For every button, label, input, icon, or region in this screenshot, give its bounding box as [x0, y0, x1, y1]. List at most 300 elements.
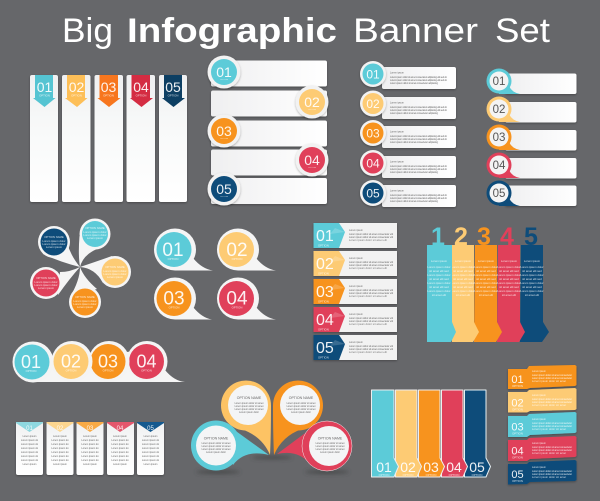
column 1: Lorem ipsum dolor [427, 289, 451, 293]
column 4 [497, 223, 525, 342]
column 05: OPTION [472, 473, 482, 477]
column 2 [451, 223, 479, 342]
card 04: Lorem ipsum do [111, 455, 129, 458]
ribbon 02: 02 [69, 79, 84, 95]
row 01: Lorem ipsum [349, 229, 363, 232]
petal orange: Lorem ipsum [77, 305, 94, 309]
column 01: 01 [376, 459, 392, 475]
circle 03: 03 [98, 352, 118, 372]
column 3: Lorem ipsum dolor [474, 265, 498, 269]
circle 04: 04 [304, 152, 320, 168]
row 02: 02 [316, 256, 334, 273]
circle 04 [360, 150, 386, 176]
row 03: Lorem ipsum dolor sit amet elit [349, 295, 387, 298]
row 01: OPTION [318, 244, 329, 248]
panel: small cards [16, 422, 164, 475]
card text: Lorem ipsum dolor sit amet consectetur adipiscing elit sed do [390, 106, 448, 109]
circle 05: OPTION [220, 196, 228, 198]
column 1: Lorem ipsum dolor [427, 265, 451, 269]
circle 03 [360, 120, 386, 146]
column 2: Lorem ipsum dolor [451, 265, 475, 269]
column 4: Lorem ipsum [501, 259, 518, 263]
column 03: OPTION [426, 473, 436, 477]
petal blue: OPTION NAME [44, 235, 64, 239]
panel: text cards with circles [360, 61, 456, 207]
column 04: 04 [446, 459, 462, 475]
ribbon 01: 01 [37, 79, 52, 95]
base tail [30, 350, 185, 382]
bubble 02: 02 [226, 240, 248, 261]
bubble 04: OPTION [232, 306, 242, 310]
circle 05: 05 [366, 186, 380, 200]
column 2: Lorem ipsum dolor [451, 281, 475, 285]
card 05: Lorem ipsum do [142, 447, 160, 450]
column 3: sit amet elit [479, 293, 493, 297]
column 4: sit amet elit sed [499, 269, 519, 273]
card text: Lorem ipsum [390, 102, 404, 104]
row 01: Lorem ipsum dolor sit amet consectetur elit [349, 236, 393, 239]
row 01: Lorem ipsum dolor sit amet elit [349, 239, 387, 242]
column 03 [418, 390, 444, 477]
tab 03: Lorem ipsum [532, 418, 546, 421]
tab 01: 01 [493, 76, 505, 88]
tab 01: Lorem ipsum dolor sit amet [532, 380, 566, 383]
pin teal [191, 420, 269, 470]
circle 01: OPTION [220, 79, 228, 81]
row 04: 04 [316, 312, 334, 329]
card 02: Lorem ipsum [53, 435, 67, 438]
title: Big [62, 12, 113, 50]
petal orange [69, 267, 101, 318]
petal red [30, 267, 80, 299]
petal yellow: OPTION NAME [105, 265, 125, 269]
card 05: Lorem ipsum do [142, 451, 160, 454]
card text: Lorem ipsum dolor sit amet consectetur adipiscing elit sed do [390, 76, 448, 79]
tab 05: Lorem ipsum dolor sit amet consectetur [532, 470, 572, 473]
ribbon 03: OPTION [103, 94, 114, 98]
circle 01: 01 [21, 352, 41, 372]
tab 02: Lorem ipsum dolor sit amet consectetur [532, 401, 572, 404]
petal teal: Lorem ipsum dolor [83, 230, 107, 234]
row 02: Lorem ipsum dolor sit amet elit [349, 267, 387, 270]
petal red: Lorem ipsum dolor [34, 283, 58, 287]
bubble 04 [217, 278, 276, 320]
row 03: 03 [316, 284, 334, 301]
petal yellow [80, 256, 131, 288]
card 03: Lorem ipsum [83, 463, 97, 466]
card text: Lorem ipsum [390, 130, 404, 134]
circle 02 [52, 341, 92, 382]
bubble 02 [217, 228, 276, 270]
circle 04 [126, 341, 168, 382]
panel: map pins [191, 380, 352, 474]
tab 01: Lorem ipsum dolor sit amet consectetur [532, 377, 572, 380]
pin yellow: Lorem ipsum dolor sit amet [235, 408, 264, 411]
column 5 [520, 223, 549, 342]
card text: Lorem ipsum dolor sit amet consectetur adipiscing [390, 200, 439, 203]
tab 02: Lorem ipsum dolor sit amet [532, 404, 566, 407]
card 03: Lorem ipsum [83, 435, 97, 438]
pin teal: Lorem ipsum dolor sit amet [202, 448, 231, 451]
card 04: Lorem ipsum [113, 463, 127, 466]
row 03: OPTION [318, 300, 329, 304]
tab 04: 04 [511, 446, 524, 458]
panel: ring tabs [486, 68, 576, 206]
column 4: 4 [500, 223, 514, 251]
column 3: Lorem ipsum dolor [474, 281, 498, 285]
card 01: Lorem ipsum [23, 463, 36, 466]
card 03: Lorem ipsum do [81, 455, 99, 458]
tab 05: Lorem ipsum [532, 466, 546, 469]
column 04: OPTION [449, 473, 459, 477]
card 03: Lorem ipsum do [81, 459, 99, 462]
panel: speech bubble numbers [154, 228, 276, 320]
row 04: OPTION [318, 328, 329, 332]
ribbon 05: 05 [165, 79, 181, 95]
title: Set [495, 12, 551, 50]
row 05: Lorem ipsum dolor sit amet consectetur elit [349, 348, 393, 351]
panel: pinwheel [30, 218, 131, 318]
column 2: Lorem ipsum dolor [451, 273, 475, 277]
column 1: 1 [431, 223, 445, 251]
row 05: Lorem ipsum dolor sit amet consectetur elit [349, 345, 393, 348]
column 1: sit amet elit sed [429, 277, 449, 281]
column 4: sit amet elit sed [499, 285, 519, 289]
tab 03: 03 [493, 132, 505, 144]
bubble 01 [154, 228, 213, 270]
title: Infographic [127, 12, 337, 50]
card 02: Lorem ipsum do [51, 439, 69, 442]
pin teal: Lorem ipsum dolor [206, 451, 226, 454]
circle 05: 05 [216, 181, 232, 197]
panel: arrow text rows [314, 223, 397, 360]
circle 02: 02 [304, 94, 320, 110]
panel: connected circles [12, 341, 185, 382]
column 4: sit amet elit [502, 293, 516, 297]
petal red: Lorem ipsum dolor [34, 280, 58, 284]
ribbon 02: OPTION [71, 94, 82, 98]
column 5: Lorem ipsum dolor [520, 281, 544, 285]
card 01: Lorem ipsum do [21, 439, 39, 442]
row 01: 01 [316, 228, 334, 245]
row 05: Lorem ipsum [349, 341, 363, 344]
pin red: Lorem ipsum dolor sit amet [316, 445, 345, 448]
tab 03: Lorem ipsum dolor sit amet consectetur [532, 422, 572, 425]
circle 03: 03 [216, 123, 232, 139]
circle 05 [208, 172, 240, 206]
pin orange: OPTION NAME [289, 396, 314, 400]
card 05: Lorem ipsum do [142, 439, 160, 442]
pin orange: Lorem ipsum dolor sit amet [287, 402, 316, 405]
card 01: Lorem ipsum do [21, 451, 39, 454]
card 03: Lorem ipsum do [81, 447, 99, 450]
ribbon 02 [65, 75, 88, 107]
card 05: Lorem ipsum [144, 463, 157, 466]
circle 03: OPTION [103, 368, 113, 372]
ribbon 04: 04 [133, 79, 149, 95]
tab 05: Lorem ipsum dolor sit amet consectetur [532, 473, 572, 476]
petal blue: Lorem ipsum [46, 245, 63, 249]
column 5: sit amet elit sed [522, 269, 542, 273]
row 04: Lorem ipsum [349, 313, 363, 316]
column 1: sit amet elit [432, 293, 446, 297]
row 02 [314, 251, 397, 276]
card 01: 01 [26, 426, 33, 432]
tab 02: 02 [493, 104, 505, 116]
tab 04: OPTION [512, 456, 523, 460]
bubble 01: OPTION [168, 257, 178, 261]
ribbon 03: 03 [101, 79, 116, 95]
card 05: 05 [147, 426, 154, 432]
card 03: Lorem ipsum do [81, 443, 99, 446]
card 02: Lorem ipsum do [51, 451, 69, 454]
card 02 [46, 422, 74, 475]
ribbon 01 [33, 75, 56, 107]
pin red: Lorem ipsum dolor sit amet [316, 442, 345, 445]
tab 02: OPTION [512, 408, 523, 412]
column 2: 2 [454, 223, 468, 251]
panel: numbered column arrows [427, 223, 549, 342]
tab 02: 02 [511, 398, 524, 410]
row 05: OPTION [318, 356, 329, 360]
row 05 [314, 335, 397, 360]
petal yellow: Lorem ipsum [107, 275, 124, 279]
row 02: Lorem ipsum dolor sit amet consectetur elit [349, 264, 393, 267]
column 4: sit amet elit sed [499, 277, 519, 281]
circle 04: OPTION [141, 368, 152, 372]
panel: vertical cards with arrow ribbons [30, 75, 187, 202]
petal red: OPTION NAME [36, 276, 56, 280]
tab 03: Lorem ipsum dolor sit amet [532, 428, 566, 431]
tab 05: OPTION [512, 479, 523, 483]
circle 02 [360, 90, 386, 116]
column 3: Lorem ipsum dolor [474, 273, 498, 277]
circle 01 [360, 61, 386, 87]
column 02 [396, 390, 422, 477]
column 1: Lorem ipsum [431, 259, 448, 263]
pin red: Lorem ipsum dolor [320, 451, 340, 454]
row 05: 05 [316, 340, 334, 357]
column 01: OPTION [379, 473, 389, 477]
column 2: Lorem ipsum dolor [451, 289, 475, 293]
circle 02: OPTION [308, 109, 316, 111]
column 3: Lorem ipsum dolor [474, 289, 498, 293]
tab 04: Lorem ipsum dolor sit amet [532, 452, 566, 455]
tab 01 [508, 365, 576, 389]
column 2: sit amet elit sed [453, 269, 473, 273]
card text: Lorem ipsum dolor sit amet consectetur adipiscing elit sed do [390, 138, 448, 141]
column 05 [464, 390, 490, 477]
tab 01: 01 [511, 374, 524, 386]
tab 05: 05 [493, 188, 505, 200]
circle 01: 01 [216, 64, 232, 80]
panel: tall outlined columns [372, 390, 490, 477]
column 03: 03 [423, 459, 439, 475]
column 5: sit amet elit [525, 293, 539, 297]
pin orange: Lorem ipsum dolor [291, 411, 311, 414]
column 04 [442, 390, 468, 477]
tab 04 [508, 436, 576, 461]
column 2: sit amet elit sed [453, 277, 473, 281]
circle 01: 01 [366, 68, 380, 82]
row 04: Lorem ipsum dolor sit amet consectetur elit [349, 317, 393, 320]
column 1: Lorem ipsum dolor [427, 281, 451, 285]
tab 02: Lorem ipsum dolor sit amet consectetur [532, 398, 572, 401]
tab 03: OPTION [512, 432, 523, 436]
row 02: OPTION [318, 272, 329, 276]
pin orange: Lorem ipsum dolor sit amet [287, 408, 316, 411]
column 3: Lorem ipsum [478, 259, 495, 263]
card text: Lorem ipsum dolor sit amet consectetur adipiscing [390, 141, 439, 144]
pin yellow: Lorem ipsum dolor [239, 411, 259, 414]
column 4: Lorem ipsum dolor [497, 281, 521, 285]
title [62, 12, 551, 50]
bubble 03: OPTION [169, 306, 179, 310]
ribbon 04 [130, 75, 153, 107]
pin yellow: Lorem ipsum dolor sit amet [235, 405, 264, 408]
card 01: Lorem ipsum do [21, 455, 39, 458]
tab 02 [508, 388, 576, 412]
column 02: 02 [400, 459, 416, 475]
pin teal: Lorem ipsum dolor sit amet [202, 445, 231, 448]
circle 01 [208, 56, 240, 88]
petal blue: Lorem ipsum dolor [42, 239, 66, 243]
panel: horizontal bars with circles [208, 56, 328, 206]
card 02: Lorem ipsum do [51, 443, 69, 446]
tab 01: OPTION [512, 384, 523, 388]
circle 02 [296, 86, 328, 118]
card 02: 02 [57, 426, 64, 432]
pin yellow [221, 380, 271, 455]
petal yellow: Lorem ipsum dolor [103, 272, 127, 276]
card 01 [16, 422, 43, 475]
column 4: Lorem ipsum dolor [497, 265, 521, 269]
row 01: Lorem ipsum dolor sit amet consectetur elit [349, 233, 393, 236]
pin red: OPTION NAME [318, 436, 343, 440]
pin red [277, 421, 352, 471]
circle 02: 02 [61, 352, 81, 372]
column 02: OPTION [403, 473, 413, 477]
ribbon 05: OPTION [168, 94, 178, 98]
card text: Lorem ipsum dolor sit amet consectetur adipiscing elit sed do [390, 197, 448, 200]
tab 03: 03 [511, 422, 524, 434]
petal red: Lorem ipsum [38, 286, 55, 290]
circle 03 [88, 341, 130, 382]
column 4: Lorem ipsum dolor [497, 273, 521, 277]
tab 04: Lorem ipsum dolor sit amet consectetur [532, 446, 572, 449]
card 05 [137, 422, 164, 475]
card 03 [76, 422, 104, 475]
card 02: Lorem ipsum [53, 463, 67, 466]
petal teal: Lorem ipsum [87, 236, 104, 240]
petal teal [79, 218, 110, 267]
tab 02: Lorem ipsum [532, 394, 546, 397]
petal orange: Lorem ipsum dolor [73, 299, 97, 303]
tab 01: Lorem ipsum dolor sit amet consectetur [532, 374, 572, 377]
card 04: 04 [117, 426, 124, 432]
card 02: Lorem ipsum do [51, 455, 69, 458]
card 05: Lorem ipsum do [142, 455, 160, 458]
row 04 [314, 307, 397, 332]
card 05: Lorem ipsum [144, 435, 157, 438]
column 1 [427, 223, 456, 342]
card 04: Lorem ipsum [113, 435, 127, 438]
card 03: Lorem ipsum do [81, 451, 99, 454]
column 3: sit amet elit sed [476, 277, 496, 281]
circle 03: 03 [366, 126, 380, 140]
card 04: Lorem ipsum do [111, 443, 129, 446]
card text: Lorem ipsum dolor sit amet consectetur adipiscing elit sed do [390, 109, 448, 112]
column 5: 5 [524, 223, 538, 251]
pin teal: Lorem ipsum dolor sit amet [202, 442, 231, 445]
card text: Lorem ipsum dolor sit amet consectetur adipiscing [390, 82, 439, 85]
circle 03 [208, 114, 240, 148]
bubble 01: 01 [162, 240, 184, 261]
row 03: Lorem ipsum dolor sit amet consectetur elit [349, 292, 393, 295]
ribbon 05 [162, 75, 185, 107]
circle 01: OPTION [26, 369, 36, 373]
card 04: Lorem ipsum do [111, 459, 129, 462]
column 3: 3 [477, 223, 491, 251]
circle 04: 04 [366, 156, 380, 170]
tab 04: 04 [493, 160, 506, 172]
column 2: sit amet elit sed [453, 285, 473, 289]
petal blue: Lorem ipsum dolor [42, 242, 66, 246]
pin yellow: Lorem ipsum dolor sit amet [235, 402, 264, 405]
column 3: sit amet elit sed [476, 285, 496, 289]
card text: Lorem ipsum dolor sit amet consectetur adipiscing elit sed do [390, 165, 448, 168]
card text: Lorem ipsum dolor sit amet consectetur adipiscing [390, 171, 439, 174]
card text: Lorem ipsum [390, 190, 404, 192]
column 3 [474, 223, 502, 342]
row 03: Lorem ipsum dolor sit amet consectetur elit [349, 289, 393, 292]
circle 05 [360, 180, 386, 206]
column 5: Lorem ipsum dolor [520, 289, 544, 293]
card 04: Lorem ipsum do [111, 439, 129, 442]
pin orange [273, 380, 323, 455]
pin yellow: OPTION NAME [237, 396, 262, 400]
card 01: Lorem ipsum do [21, 447, 39, 450]
column 5: Lorem ipsum dolor [520, 273, 544, 277]
pin red: Lorem ipsum dolor sit amet [316, 448, 345, 451]
petal orange: OPTION NAME [75, 295, 95, 299]
circle 04: OPTION [308, 167, 316, 169]
card text: Lorem ipsum dolor sit amet consectetur adipiscing elit sed do [390, 168, 448, 171]
bubble 04: 04 [226, 288, 248, 310]
card 01: Lorem ipsum do [21, 459, 39, 462]
column 5: sit amet elit sed [522, 285, 542, 289]
card 04: Lorem ipsum do [111, 451, 129, 454]
tab 01: Lorem ipsum [532, 370, 546, 373]
card text: Lorem ipsum [390, 160, 404, 164]
circle 02: 02 [366, 97, 380, 111]
tab 05: 05 [511, 469, 524, 481]
tab 04: Lorem ipsum dolor sit amet consectetur [532, 449, 572, 452]
pin shadows [196, 456, 349, 474]
column 5: Lorem ipsum [524, 259, 541, 263]
column 1: sit amet elit sed [429, 269, 449, 273]
row 04: Lorem ipsum dolor sit amet consectetur elit [349, 320, 393, 323]
tab 03: Lorem ipsum dolor sit amet consectetur [532, 425, 572, 428]
pin orange: Lorem ipsum dolor sit amet [287, 405, 316, 408]
column 05: 05 [469, 459, 485, 475]
card 02: Lorem ipsum do [51, 459, 69, 462]
card text: Lorem ipsum dolor sit amet consectetur adipiscing elit sed do [390, 194, 448, 197]
pin teal: OPTION NAME [204, 436, 229, 440]
ribbon 01: OPTION [39, 94, 50, 98]
petal blue [38, 226, 80, 267]
circle 03: OPTION [220, 138, 228, 140]
